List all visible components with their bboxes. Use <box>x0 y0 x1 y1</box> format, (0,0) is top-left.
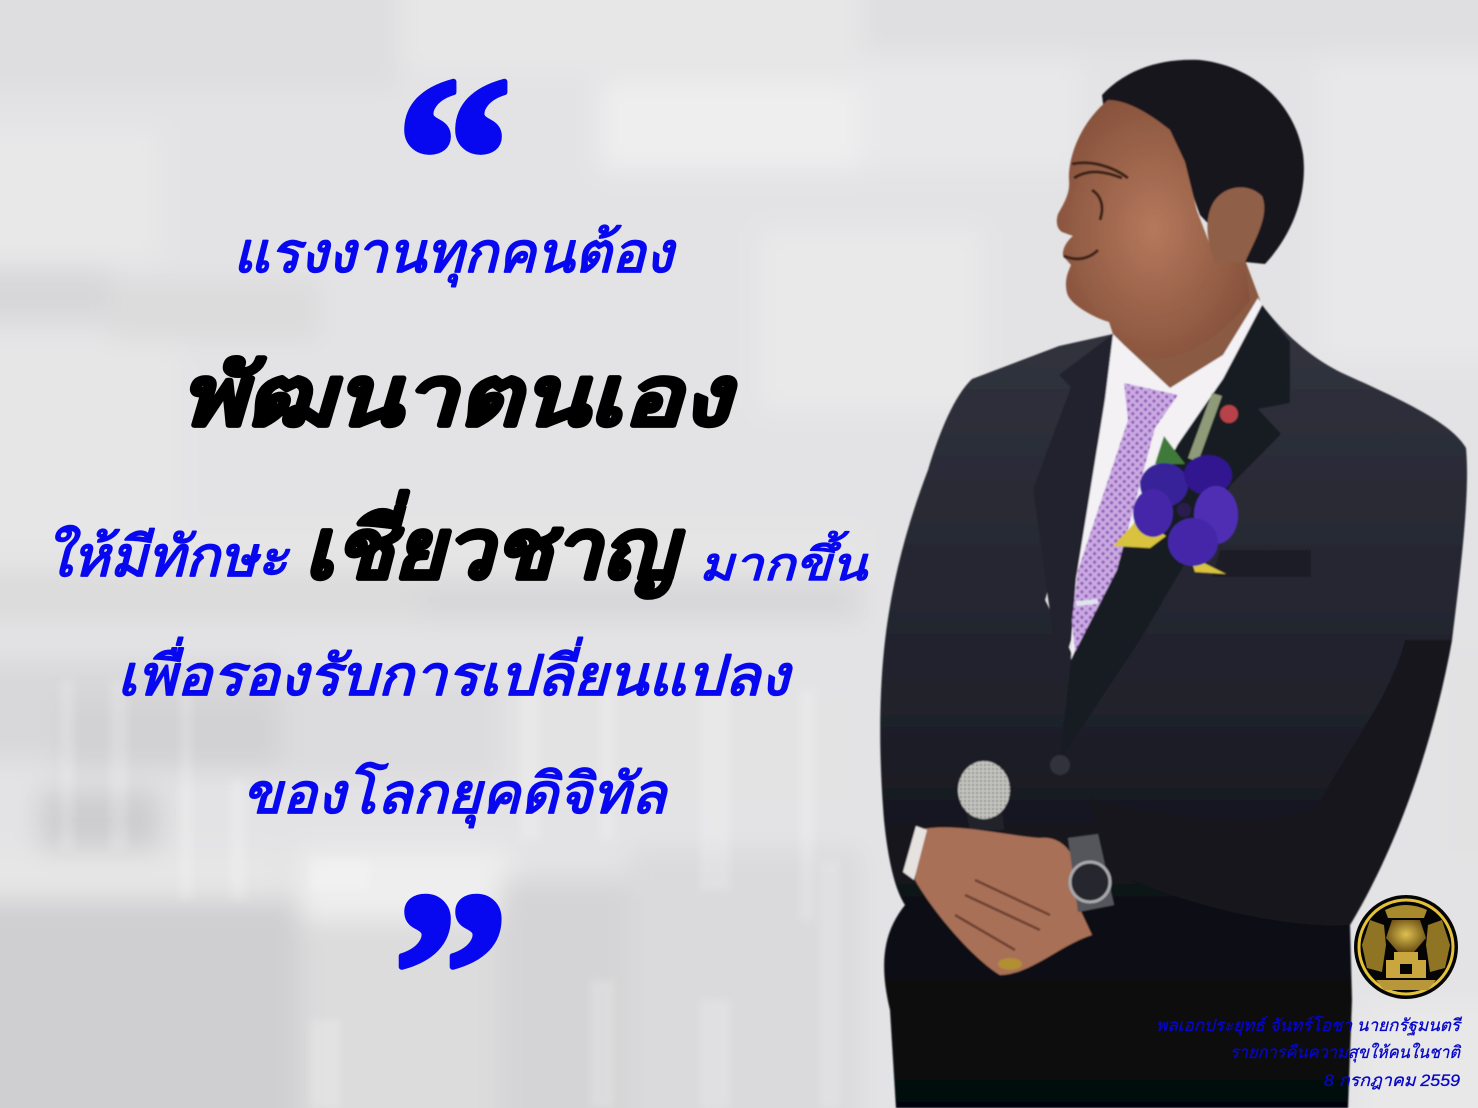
signature block: พลเอกประยุทธ์ จันทร์โอชา นายกรัฐมนตรี <box>1156 1015 1463 1036</box>
microphone <box>958 761 1010 830</box>
seal urn <box>1386 920 1426 952</box>
line 3 end: มากขึ้น <box>699 531 869 590</box>
signature block: รายการคืนความสุขให้คนในชาติ <box>1230 1042 1462 1063</box>
sleeve shadow <box>1090 640 1452 926</box>
line 4: เพื่อรองรับการเปลี่ยนแปลง <box>117 637 793 707</box>
left lapel <box>1033 334 1113 677</box>
clasped hands <box>915 827 1092 975</box>
line 5: ของโลกยุคดิจิทัล <box>242 762 669 828</box>
seal pedestal <box>1386 952 1426 978</box>
line 2: emphasis: พัฒนาตนเอง <box>180 349 737 443</box>
opening quotation mark: “ <box>396 30 512 287</box>
seal guardian left <box>1362 920 1386 972</box>
chest pocket <box>1212 550 1311 577</box>
line 1: แรงงานทุกคนต้อง <box>233 221 677 287</box>
shirt cuff <box>903 826 927 880</box>
seal top ornament <box>1385 905 1427 918</box>
signature block: 8 กรกฎาคม 2559 <box>1324 1071 1461 1090</box>
seal base <box>1376 980 1436 990</box>
tie clip <box>1076 599 1098 606</box>
ear <box>1207 187 1264 262</box>
signature block <box>1156 1015 1463 1090</box>
neck <box>1113 260 1260 395</box>
suit jacket <box>880 305 1467 1108</box>
right lapel <box>1060 305 1290 760</box>
hair <box>1102 60 1304 264</box>
lapel pin <box>1220 405 1238 423</box>
line 3 start: ให้มีทักษะ <box>44 525 290 588</box>
closing quotation mark: ” <box>393 845 509 1102</box>
line 3 emphasis: เชี่ยวชาญ <box>304 490 685 599</box>
jacket button <box>1050 755 1070 775</box>
government seal <box>1354 895 1458 999</box>
brow, eye and mouth <box>1064 163 1128 259</box>
person: prime minister in dark suit <box>880 60 1467 1108</box>
necktie <box>1072 383 1178 652</box>
face <box>1057 100 1250 359</box>
seal guardian right <box>1426 920 1450 972</box>
wristwatch <box>1068 834 1114 912</box>
shirt <box>1071 298 1262 660</box>
ring <box>998 958 1022 970</box>
corsage: purple orchid with yellow ribbon <box>1113 393 1238 574</box>
